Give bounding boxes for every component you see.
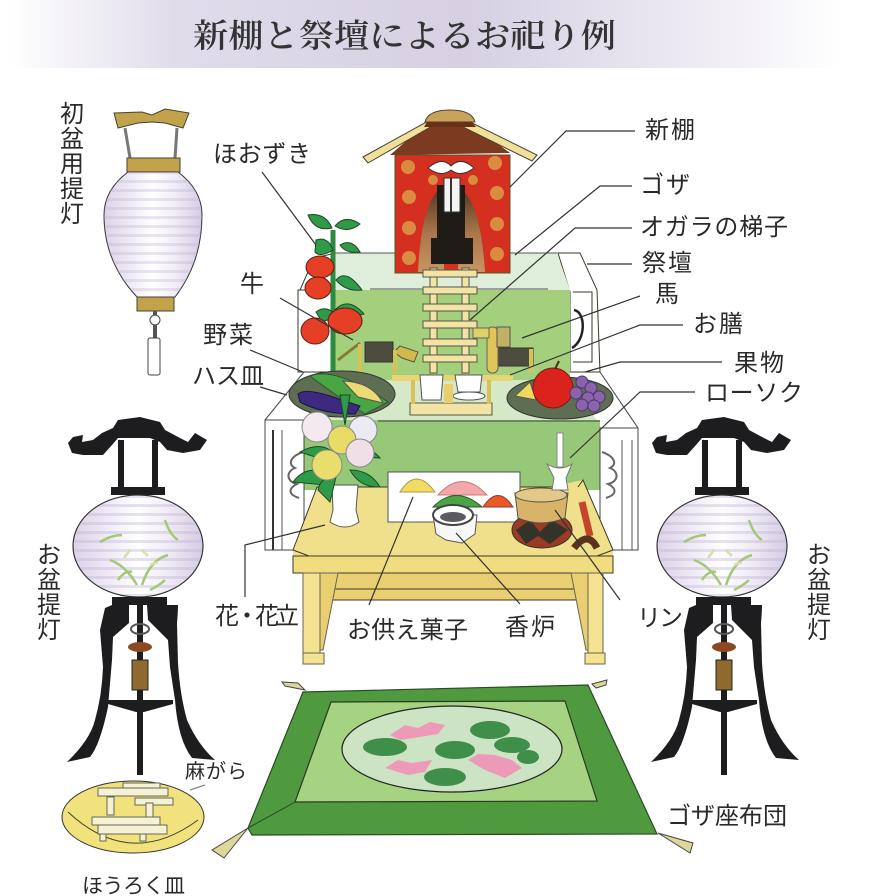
table: [293, 480, 613, 664]
memorial tablet: [431, 185, 473, 264]
ogara ladder: [423, 268, 477, 373]
lotus plate with vegetables: [289, 371, 395, 417]
lantern top ornament: [68, 417, 207, 455]
horse: [473, 327, 533, 373]
vertical labels: 提: [60, 176, 84, 203]
labels: リン: [637, 605, 683, 632]
labels: 野菜: [203, 322, 253, 349]
candle: [547, 433, 572, 490]
labels: 新棚: [645, 117, 695, 144]
houroku plate with hemp stalks: [62, 781, 204, 853]
vertical labels: 盆: [60, 126, 84, 153]
title band: [8, 0, 843, 68]
labels: ゴザ: [640, 172, 690, 199]
lantern globe: [73, 495, 203, 597]
vertical labels: お: [807, 542, 831, 569]
roof: [390, 123, 510, 155]
right bon lantern: [651, 417, 799, 775]
vertical labels: 灯: [37, 617, 61, 644]
vertical labels: 初: [60, 101, 84, 128]
labels: ローソク: [705, 380, 803, 407]
rin bell and cushion: [512, 488, 572, 548]
labels: オガラの梯子: [640, 214, 788, 241]
vertical labels: 灯: [807, 617, 831, 644]
vertical labels: 提: [37, 592, 61, 619]
vertical labels: お: [37, 542, 61, 569]
flowers and vase: [293, 395, 380, 527]
labels: ほおずき: [213, 141, 311, 168]
labels: 牛: [240, 271, 264, 298]
incense burner: [433, 505, 477, 543]
vertical labels: 盆: [37, 567, 61, 594]
vertical labels: 盆: [807, 567, 831, 594]
labels: 麻がら: [185, 760, 247, 783]
left bon lantern: [67, 417, 215, 775]
red curtain: [395, 155, 510, 273]
vertical labels: 提: [807, 592, 831, 619]
labels: 祭壇: [642, 250, 692, 277]
rin striker: [574, 502, 597, 548]
shrine (shintana): [363, 110, 537, 273]
labels: ハス皿: [192, 363, 264, 390]
cushion tassels: [212, 680, 693, 858]
labels: ゴザ座布団: [667, 803, 787, 830]
labels: 馬: [655, 281, 679, 308]
labels: 香炉: [505, 614, 555, 641]
vertical labels: 灯: [60, 201, 84, 228]
goza cushion: [212, 680, 693, 858]
cow: [338, 342, 418, 374]
labels: お供え菓子: [347, 617, 468, 644]
hoozuki plant: [301, 215, 364, 372]
lotus motif: [363, 721, 539, 786]
labels: 果物: [734, 350, 784, 377]
ozen tray: [392, 375, 513, 415]
labels: 花・花立: [215, 603, 299, 630]
lantern stand: [67, 597, 215, 762]
vertical labels: 用: [60, 151, 84, 178]
vertical labels: [37, 101, 831, 644]
labels: [82, 117, 803, 896]
labels: お膳: [693, 311, 743, 338]
sweets tray: [388, 472, 520, 522]
cow and horse: [338, 327, 533, 374]
altar: upper and lower tiers: [265, 253, 638, 550]
hatsubon small lantern: [104, 109, 202, 375]
leader lines: [190, 131, 722, 790]
title: 新棚と祭壇によるお祀り例: [193, 18, 616, 55]
lotus plate with fruit: [507, 361, 613, 419]
